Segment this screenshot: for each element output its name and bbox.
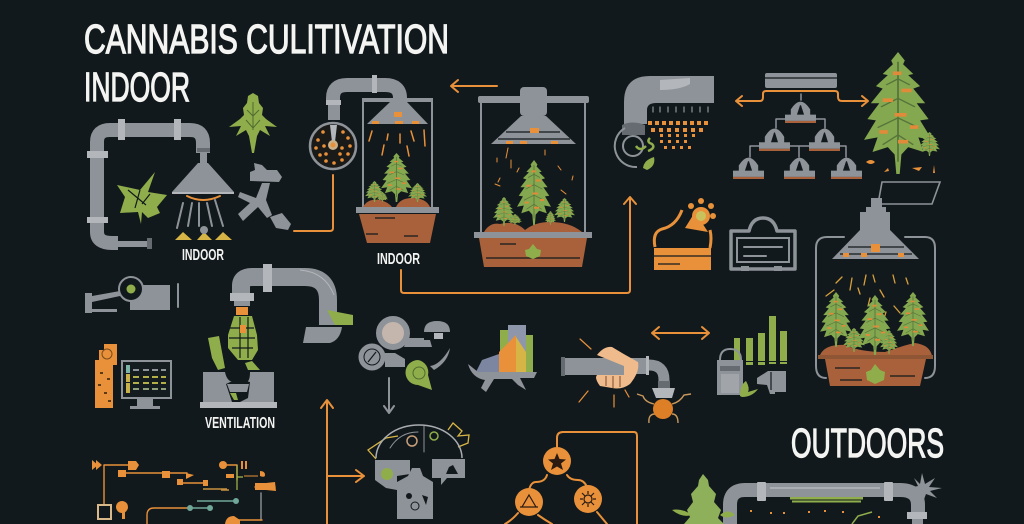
flow diagram: orange nodes — [505, 432, 637, 524]
arrow: vertical with branch — [321, 400, 364, 524]
icon: ventilation faucet — [200, 264, 353, 408]
arrow: left — [451, 80, 497, 92]
pipe loop with lamp — [87, 119, 234, 249]
heading: indoor: INDOOR — [84, 64, 190, 110]
arrow: tank to shower — [401, 197, 636, 293]
plant: large cannabis tree — [864, 52, 940, 174]
label: ventilation: VENTILATION — [205, 415, 275, 432]
tank: large with trees — [816, 182, 940, 386]
icon: orange panel and monitor — [95, 344, 171, 409]
title: CANNABIS CULITIVATION — [84, 16, 449, 62]
icon: cannabis bud — [229, 93, 277, 153]
outdoor pipe with plant — [672, 473, 942, 524]
label: indoor tank: INDOOR — [377, 251, 420, 268]
tank: second indoor — [474, 87, 592, 267]
tank: first indoor with pipe filter — [310, 75, 439, 243]
lamp hierarchy diagram — [733, 73, 868, 179]
arrow: filter connector — [294, 175, 333, 231]
icon: shower pipe — [615, 76, 714, 170]
bar chart with bucket and lamp — [717, 316, 790, 397]
icon: camera device — [85, 277, 178, 313]
dashboard dome icon — [368, 423, 469, 519]
icon: grey badge — [731, 218, 795, 271]
arrow: double horizontal — [652, 327, 709, 339]
icon: hand on pipe and bug — [561, 339, 691, 423]
circuit diagram — [92, 460, 276, 524]
chart on stand — [468, 325, 537, 392]
icon: gauges and valve — [361, 319, 450, 390]
icon: grey cloud and branches — [238, 163, 291, 230]
arrow: down grey — [384, 378, 394, 413]
label: indoor lamp: INDOOR — [182, 247, 224, 264]
icon: orange device with bell — [654, 198, 716, 270]
icon: green leaves — [117, 172, 167, 224]
heading: outdoors: OUTDOORS — [791, 420, 944, 466]
